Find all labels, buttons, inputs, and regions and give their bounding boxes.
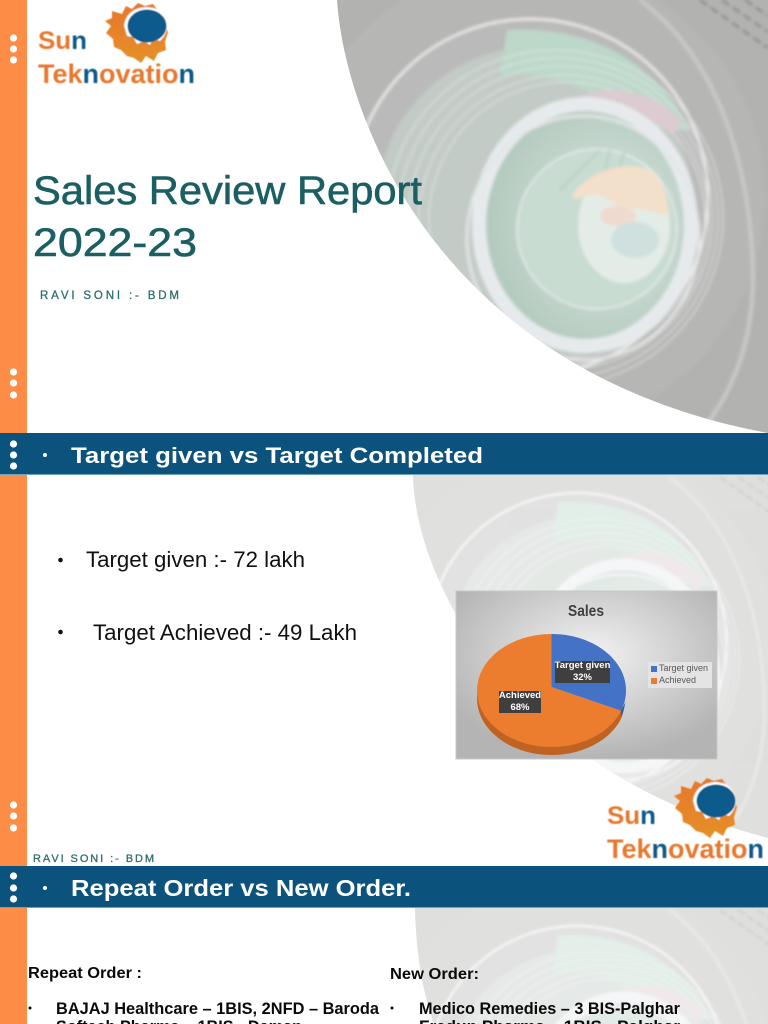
legend: Target given (659, 663, 708, 673)
footer: presenter: RAVI SONI :- BDM (33, 853, 154, 865)
image: faded camera lens (415, 908, 768, 1024)
heading band: Repeat Order vs New Order. (71, 875, 411, 901)
chart: sales pie (456, 591, 717, 759)
title: 2022-23 (33, 221, 197, 265)
sidebar: orange strip (0, 475, 27, 866)
logo: Sun Teknovation (607, 778, 764, 864)
pie slice: target given (552, 634, 626, 711)
chart: sales pie: Sales (568, 603, 604, 620)
data label: achieved: Achieved (499, 690, 541, 701)
panel: slide 1 cover (0, 0, 768, 440)
title (33, 169, 422, 265)
column: repeat orders: BAJAJ Healthcare – 1BIS, 2NFD – Baroda (56, 999, 380, 1018)
title: Sales Review Report (33, 169, 422, 213)
column: new orders: Medico Remedies – 3 BIS-Palghar (419, 999, 680, 1018)
legend: Achieved (659, 675, 696, 685)
icon: lower sidebar dots (10, 368, 17, 399)
column: new orders (390, 966, 680, 1024)
pie side wall (477, 690, 621, 755)
data label: achieved: 68% (510, 702, 530, 713)
column: repeat orders (28, 965, 380, 1024)
heading band: Target given vs Target Completed (71, 443, 483, 468)
panel: slide 3 orders (0, 866, 768, 1024)
image: camera lens (337, 0, 768, 433)
panel: slide 2 target (0, 433, 768, 866)
sidebar: orange strip (0, 0, 27, 433)
logo: Sun Teknovation (38, 3, 195, 89)
heading band (0, 433, 768, 475)
icon: top sidebar dots (10, 34, 17, 64)
sidebar: orange strip (0, 908, 27, 1024)
pie slice: achieved (477, 634, 621, 747)
text: target given: Target given :- 72 lakh (86, 547, 305, 572)
data label: achieved (499, 690, 541, 713)
column: repeat orders: Repeat Order : (28, 965, 142, 982)
subtitle: presenter: RAVI SONI :- BDM (40, 290, 179, 302)
image: faded camera lens (413, 475, 768, 838)
data label: target given (555, 660, 611, 683)
heading band (0, 866, 768, 908)
legend (648, 662, 712, 688)
data label: target given: Target given (555, 660, 611, 671)
icon: sidebar dots (10, 801, 17, 832)
text: target achieved: Target Achieved :- 49 Lakh (93, 620, 357, 645)
column: new orders: New Order: (390, 966, 479, 983)
data label: target given: 32% (573, 672, 593, 683)
